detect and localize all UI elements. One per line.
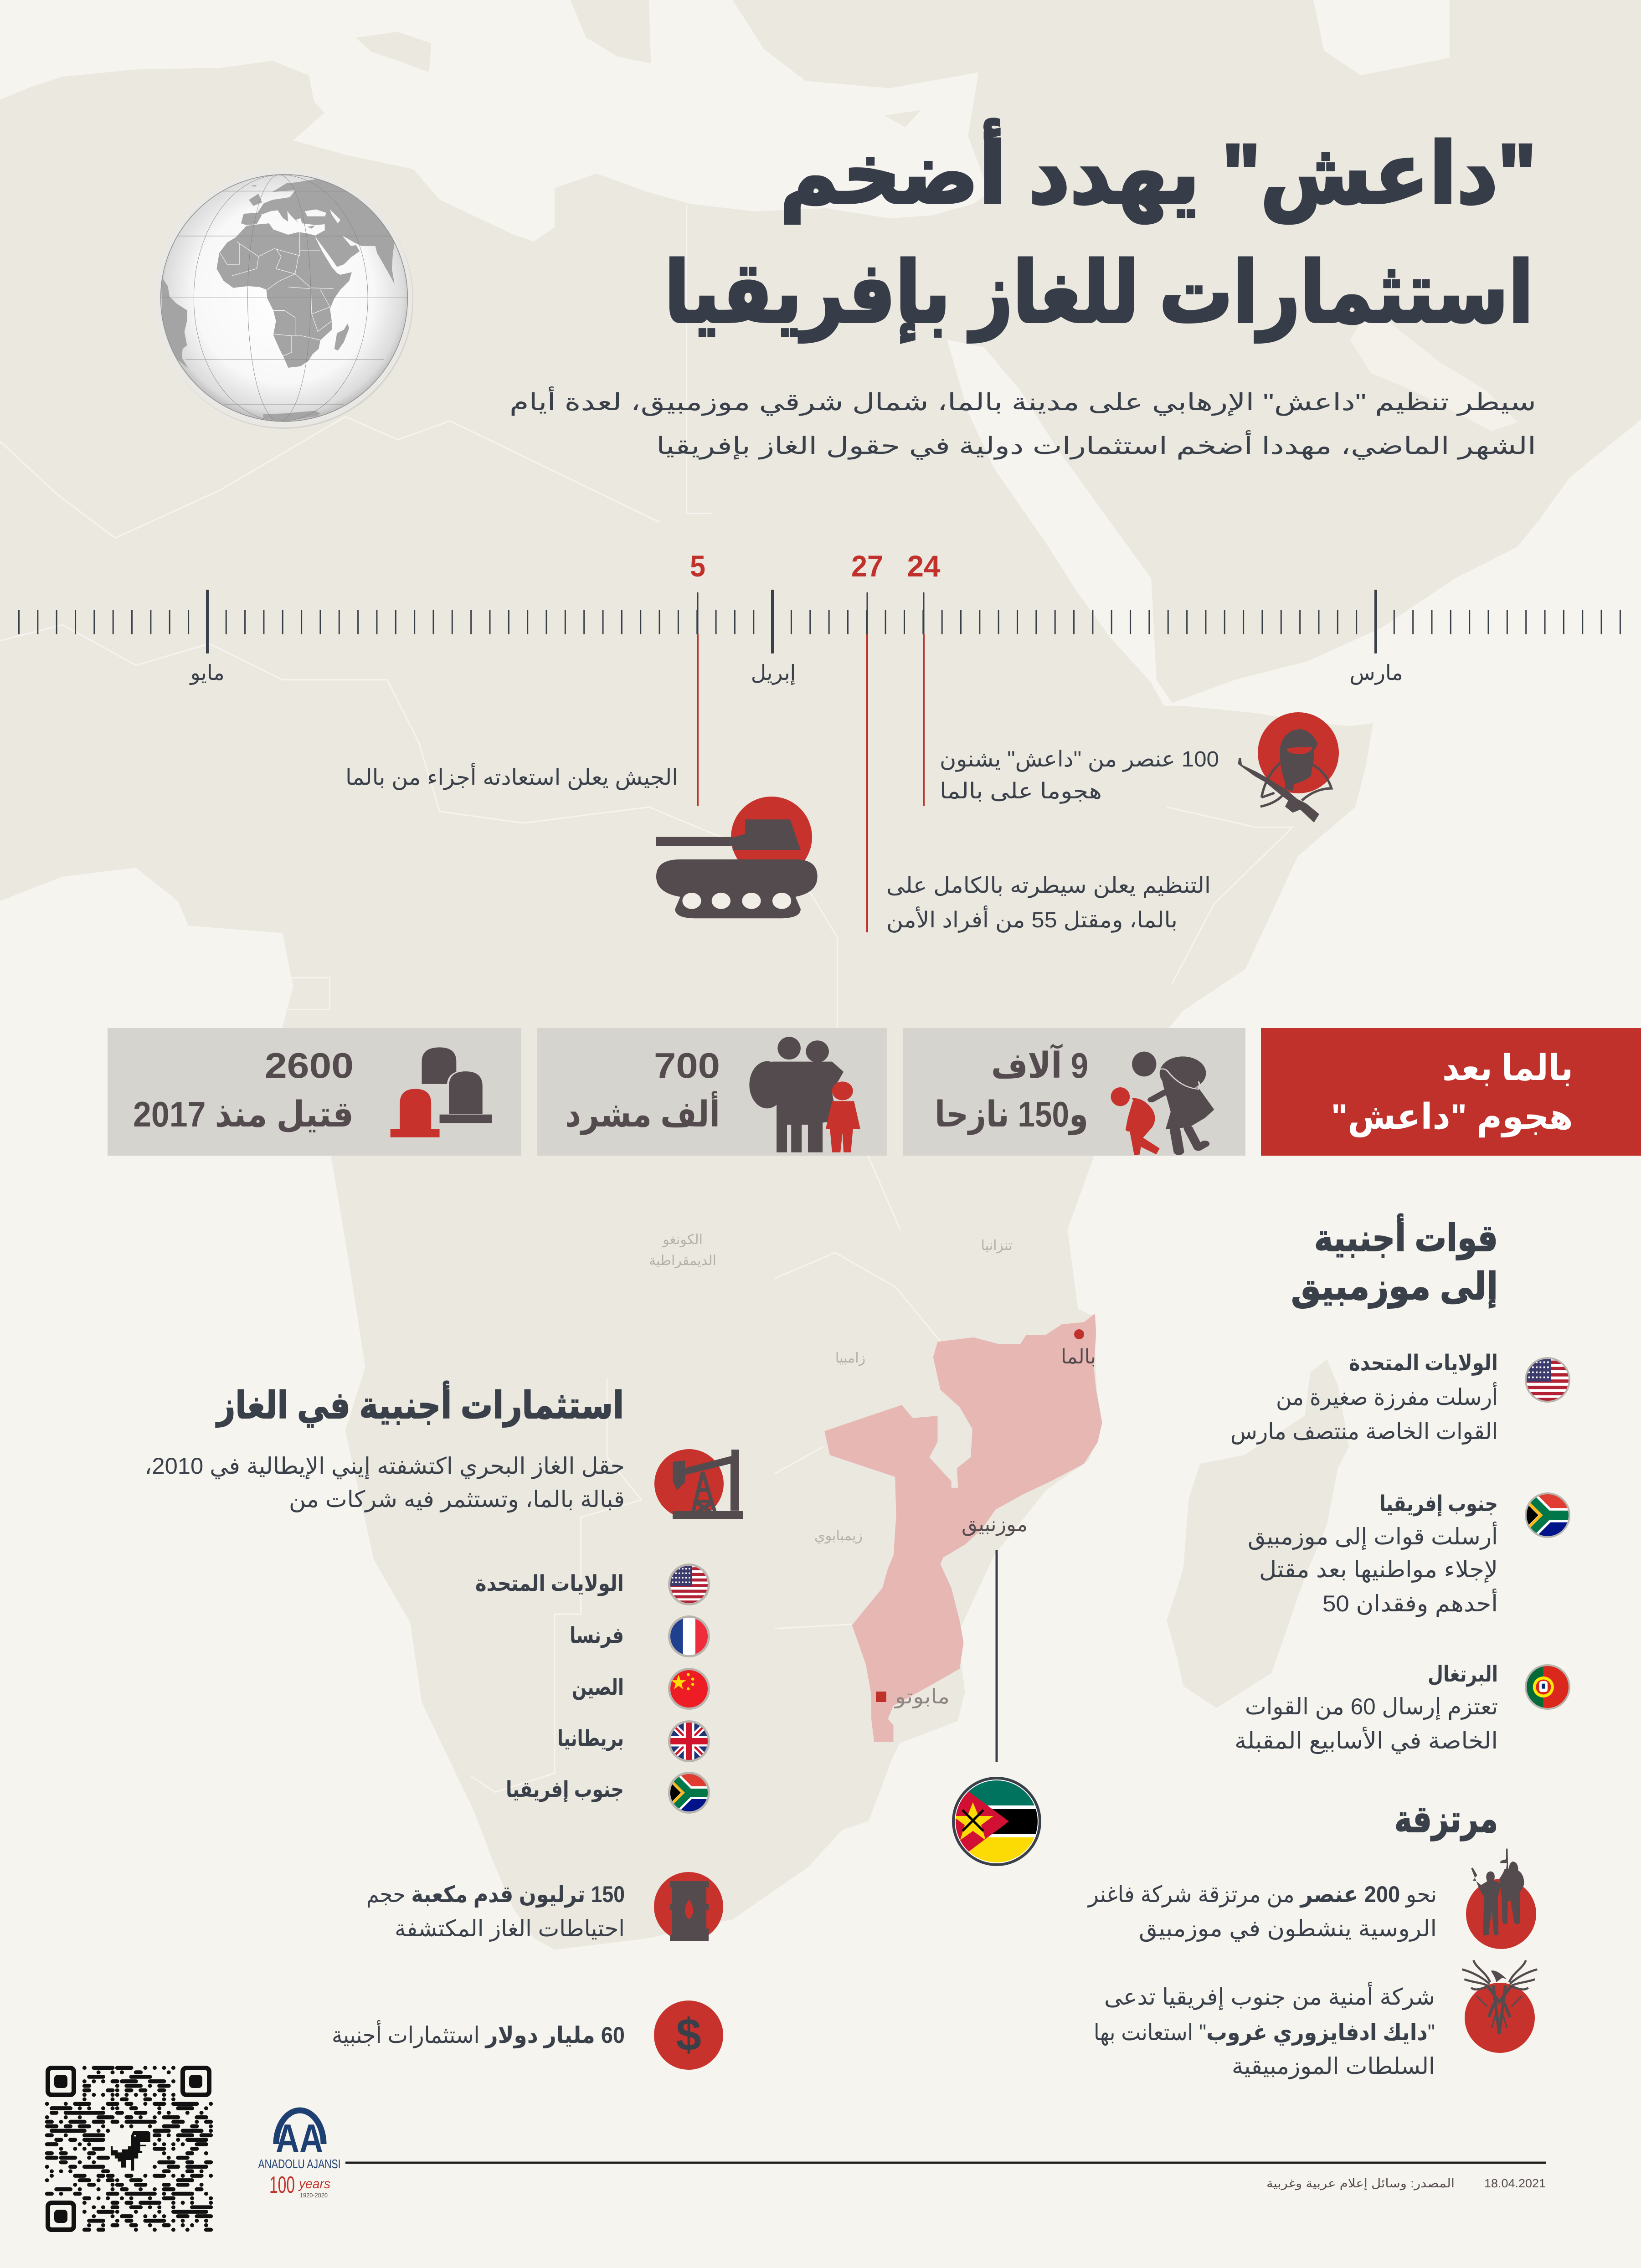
block: Portugal forces: تعتزم إرسال 60 من القوات bbox=[1245, 1694, 1498, 1720]
intro paragraph: الشهر الماضي، مهددا أضخم استثمارات دولية في حقول الغاز بإفريقيا bbox=[656, 430, 1536, 460]
map marker: Maputo: مابوتو bbox=[894, 1686, 950, 1708]
block: United States forces: الولايات المتحدة bbox=[1349, 1351, 1498, 1376]
globe bbox=[154, 170, 413, 429]
heading: foreign forces: قوات أجنبية bbox=[1314, 1214, 1498, 1260]
globe land: Eurasia bbox=[257, 179, 395, 284]
heading: foreign forces bbox=[1291, 1214, 1498, 1309]
map marker: Palma: بالما bbox=[1061, 1346, 1096, 1368]
block: United States forces bbox=[1230, 1351, 1498, 1445]
timeline ruler bbox=[18, 590, 1623, 653]
map label: Tanzania: تنزانيا bbox=[981, 1238, 1012, 1253]
map label: Congo: الكونغو bbox=[662, 1232, 703, 1247]
block: United States forces: أرسلت مفرزة صغيرة من bbox=[1276, 1382, 1498, 1410]
logo: Anadolu Agency: AA bbox=[276, 2116, 323, 2161]
QR code bbox=[47, 2068, 211, 2230]
connector to Mozambique flag bbox=[995, 1550, 998, 1762]
text: Wagner mercenaries: نحو 200 عنصر من مرتزقة شركة فاغنر bbox=[1087, 1882, 1437, 1908]
text: Dyck Advisory Group: السلطات الموزمبيقية bbox=[1232, 2053, 1435, 2079]
block: South Africa forces bbox=[1248, 1492, 1498, 1617]
text: Dyck Advisory Group: "دايك ادفايزوري غروب" استعانت بها bbox=[1094, 2020, 1435, 2046]
event text: army: الجيش يعلن استعادته أجزاء من بالما bbox=[345, 763, 678, 790]
row: South Africa investor bbox=[506, 1772, 710, 1814]
text: gas reserves bbox=[366, 1882, 625, 1942]
background map: Persian Gulf bbox=[1350, 307, 1518, 431]
logo: Anadolu Agency bbox=[258, 2110, 341, 2199]
panel: homeless: ألف مشرد bbox=[565, 1091, 720, 1135]
heading: mercenaries: مرتزقة bbox=[1394, 1799, 1498, 1841]
text: Wagner mercenaries bbox=[1087, 1882, 1437, 1942]
globe land: Africa bbox=[216, 223, 352, 368]
block: South Africa forces: أرسلت قوات إلى موزمبيق bbox=[1248, 1522, 1498, 1550]
block: United States forces: القوات الخاصة منتصف مارس bbox=[1230, 1419, 1498, 1445]
block: Portugal forces bbox=[1235, 1662, 1498, 1754]
icon: tank bbox=[656, 797, 818, 918]
row: Britain investor: بريطانيا bbox=[557, 1727, 624, 1751]
footer rule bbox=[345, 2162, 1546, 2164]
panel: killed: 2600 bbox=[265, 1045, 354, 1085]
block: South Africa forces: جنوب إفريقيا bbox=[1379, 1492, 1498, 1517]
red event line: 5 April bbox=[697, 634, 699, 806]
flag: South Africa bbox=[1525, 1492, 1570, 1538]
panel: killed: قتيل منذ 2017 bbox=[133, 1094, 354, 1134]
red event line: 27 March bbox=[866, 634, 868, 932]
icon: refugees bbox=[1111, 1052, 1214, 1155]
flag: Portugal bbox=[1525, 1664, 1570, 1710]
event text: control bbox=[886, 874, 1211, 933]
logo: Anadolu Agency: 1920-2020 bbox=[300, 2191, 328, 2199]
panel: displaced: 9 آلاف bbox=[991, 1044, 1088, 1085]
text: Dyck Advisory Group bbox=[1094, 1982, 1435, 2079]
row: US investor bbox=[475, 1563, 710, 1605]
map label: Zimbabwe: زيمبابوي bbox=[814, 1528, 863, 1543]
map marker: Palma bbox=[1061, 1329, 1096, 1368]
text: foreign investment: 60 مليار دولار استثمارات أجنبية bbox=[332, 2020, 625, 2049]
panel: stats header: هجوم "داعش" bbox=[1331, 1096, 1573, 1137]
event text: control: بالما، ومقتل 55 من أفراد الأمن bbox=[886, 905, 1178, 933]
globe land: Madagascar bbox=[334, 324, 349, 350]
map label: Mozambique: موزنبيق bbox=[962, 1513, 1028, 1536]
event text: attack: 100 عنصر من "داعش" يشنون bbox=[940, 747, 1219, 772]
text: gas field: حقل الغاز البحري اكتشفته إيني الإيطالية في 2010، bbox=[144, 1453, 625, 1480]
month label: April: إبريل bbox=[751, 661, 796, 685]
intro paragraph: سيطر تنظيم "داعش" الإرهابي على مدينة بالما، شمال شرقي موزمبيق، لعدة أيام bbox=[509, 386, 1536, 416]
event text: control: التنظيم يعلن سيطرته بالكامل على bbox=[886, 874, 1211, 898]
map marker: Maputo bbox=[876, 1686, 950, 1708]
intro paragraph bbox=[509, 386, 1536, 460]
globe land: Spain and islands bbox=[241, 185, 315, 229]
panel: displaced: و150 نازحا bbox=[935, 1094, 1088, 1135]
text: gas reserves: 150 ترليون قدم مكعبة حجم bbox=[366, 1882, 625, 1908]
row: China investor: الصين bbox=[572, 1676, 624, 1700]
text: Dyck Advisory Group: شركة أمنية من جنوب إفريقيا تدعى bbox=[1104, 1982, 1435, 2011]
title bbox=[664, 119, 1536, 343]
icon: phoenix bbox=[1462, 1960, 1537, 2053]
flag: United States bbox=[1525, 1357, 1570, 1403]
heading: gas investments: استثمارات أجنبية في الغاز bbox=[216, 1381, 624, 1427]
panel: stats header: بالما بعد bbox=[1442, 1048, 1573, 1088]
red event line: 24 March bbox=[923, 634, 925, 806]
month label: May: مايو bbox=[189, 661, 225, 685]
row: China investor bbox=[572, 1668, 710, 1710]
flag: Mozambique bbox=[952, 1777, 1044, 1867]
text: gas field: قبالة بالما، وتستثمر فيه شركات من bbox=[289, 1486, 625, 1513]
globe land: Antarctica bbox=[263, 411, 320, 421]
block: Portugal forces: الخاصة في الأسابيع المقبلة bbox=[1235, 1727, 1498, 1754]
row: France investor bbox=[570, 1615, 710, 1657]
icon: oil pumpjack bbox=[654, 1449, 743, 1519]
row: France investor: فرنسا bbox=[570, 1624, 624, 1648]
icon: dollar: $ bbox=[676, 2009, 701, 2060]
globe land: South America bbox=[161, 276, 188, 368]
block: South Africa forces: لإجلاء مواطنيها بعد مقتل bbox=[1259, 1557, 1498, 1583]
title: "داعش" يهدد أضخم bbox=[780, 119, 1536, 224]
map label: Zambia: زامبيا bbox=[835, 1351, 865, 1366]
title: استثمارات للغاز بإفريقيا bbox=[664, 246, 1533, 343]
background map: Italy and Greece bbox=[356, 0, 921, 127]
timeline date: 5: 5 bbox=[690, 549, 705, 583]
logo: Anadolu Agency: 100 bbox=[269, 2172, 295, 2198]
timeline date: 27: 27 bbox=[851, 549, 883, 583]
footer source: المصدر: وسائل إعلام عربية وغربية bbox=[1266, 2176, 1455, 2191]
panel: killed bbox=[108, 1028, 521, 1156]
heading: foreign forces: إلى موزمبيق bbox=[1291, 1266, 1498, 1309]
event text: attack: هجوما على بالما bbox=[940, 779, 1102, 804]
icon: graves bbox=[391, 1047, 492, 1137]
icon: masked fighter bbox=[1238, 712, 1339, 823]
timeline date: 24: 24 bbox=[907, 549, 941, 583]
panel: stats header bbox=[1261, 1028, 1641, 1156]
text: Wagner mercenaries: الروسية ينشطون في موزمبيق bbox=[1139, 1916, 1437, 1942]
row: South Africa investor: جنوب إفريقيا bbox=[506, 1778, 624, 1802]
icon: family bbox=[749, 1037, 860, 1152]
icon: soldiers bbox=[1466, 1849, 1536, 1949]
panel: homeless: 700 bbox=[654, 1045, 720, 1085]
globe seas bbox=[305, 209, 340, 223]
globe borders bbox=[220, 232, 334, 356]
row: Britain investor bbox=[557, 1720, 710, 1762]
panel: homeless bbox=[537, 1028, 887, 1156]
footer date: 18.04.2021 bbox=[1484, 2176, 1546, 2190]
panel: displaced bbox=[903, 1028, 1245, 1156]
background map: country borders bbox=[0, 204, 1292, 1792]
text: gas field bbox=[144, 1453, 625, 1513]
background map: Madagascar bbox=[1167, 1359, 1349, 1708]
row: US investor: الولايات المتحدة bbox=[475, 1572, 624, 1596]
map: Mozambique bbox=[824, 1313, 1102, 1742]
map label: Congo bbox=[649, 1232, 716, 1268]
text: gas reserves: احتياطات الغاز المكتشفة bbox=[395, 1916, 625, 1942]
logo: Anadolu Agency: ANADOLU AJANSI bbox=[258, 2157, 341, 2171]
map label: Congo: الديمقراطية bbox=[649, 1253, 716, 1268]
block: South Africa forces: أحدهم وفقدان 50 bbox=[1322, 1589, 1498, 1617]
globe grid bbox=[160, 191, 408, 405]
icon: gas barrel bbox=[654, 1872, 723, 1941]
event text: attack bbox=[940, 747, 1219, 804]
month label: March: مارس bbox=[1349, 661, 1403, 685]
icon: dollar bbox=[654, 2001, 723, 2070]
logo: Anadolu Agency: years bbox=[298, 2176, 330, 2191]
block: Portugal forces: البرتغال bbox=[1428, 1662, 1498, 1687]
